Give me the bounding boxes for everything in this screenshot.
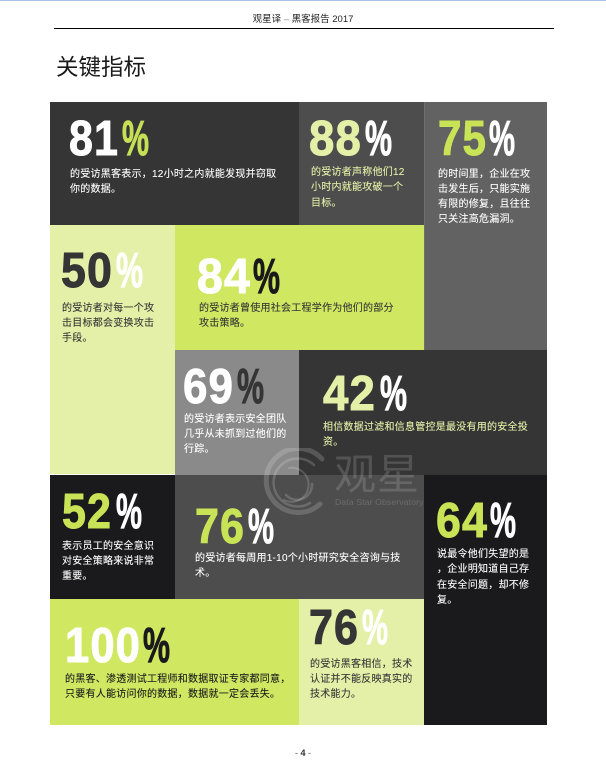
panel: 76% hours: 76 bbox=[195, 500, 245, 554]
panel: 76% hours bbox=[175, 475, 424, 599]
panel: 69%: % bbox=[237, 360, 264, 414]
panel: 52%: 表示员工的安全意识 bbox=[62, 540, 154, 552]
panel: 76% certification bbox=[299, 599, 424, 725]
panel: 69%: 几乎从未抓到过他们的 bbox=[184, 429, 286, 440]
panel: 75%: % bbox=[489, 112, 515, 166]
panel: 50%: 的受访者对每一个攻 bbox=[62, 302, 154, 314]
panel: 64% bbox=[424, 475, 547, 725]
running header: 观星译 – 黑客报告 2017 bbox=[253, 14, 353, 25]
panel: 100%: 的黑客、渗透测试工程师和数据取证专家都同意， bbox=[65, 674, 290, 684]
panel: 81% bbox=[50, 102, 299, 225]
panel: 64%: ，企业明知道自己存 bbox=[437, 564, 529, 575]
panel: 84%: 攻击策略。 bbox=[199, 318, 250, 329]
panel: 88%: 小时内就能攻破一个 bbox=[311, 182, 403, 193]
panel: 50%: 击目标都会变换攻击 bbox=[62, 318, 154, 329]
panel: 76% hours: 的受访者每周用1-10个小时研究安全咨询与技 bbox=[195, 553, 401, 564]
panel: 76% certification: 认证并不能反映真实的 bbox=[310, 674, 412, 685]
page number: - 4 - bbox=[295, 748, 311, 758]
panel: 42%: 资。 bbox=[323, 437, 344, 448]
panel: 81%: 的受访黑客表示，12小时之内就能发现并窃取 bbox=[70, 168, 276, 180]
panel: 81%: % bbox=[122, 112, 149, 166]
panel: 50%: 50 bbox=[61, 244, 113, 298]
panel: 75%: 75 bbox=[438, 112, 487, 166]
panel: 84%: 84 bbox=[197, 250, 251, 304]
panel: 88%: 88 bbox=[309, 112, 362, 166]
panel: 88%: 目标。 bbox=[311, 198, 342, 209]
panel: 81%: 81 bbox=[69, 112, 119, 166]
panel: 81%: 你的数据。 bbox=[70, 184, 121, 195]
panel: 69%: 的受访者表示安全团队 bbox=[184, 414, 286, 424]
panel: 50% bbox=[50, 225, 175, 474]
panel: 75%: 击发生后，只能实施 bbox=[438, 184, 530, 195]
panel: 64%: % bbox=[490, 494, 516, 548]
panel: 75%: 有限的修复，且往往 bbox=[438, 199, 530, 210]
panel: 84%: % bbox=[253, 250, 280, 304]
panel: 76% certification: 技术能力。 bbox=[310, 689, 361, 700]
panel: 84% bbox=[175, 225, 424, 350]
panel: 100%: % bbox=[143, 619, 170, 673]
panel: 52% bbox=[50, 475, 175, 599]
panel: 64%: 在安全问题，却不修 bbox=[437, 580, 529, 591]
panel: 42%: % bbox=[380, 367, 407, 421]
watermark tagline: Data Star Observatory bbox=[335, 497, 424, 507]
panel: 42% bbox=[299, 350, 547, 475]
panel: 100%: 100 bbox=[65, 619, 141, 673]
panel: 75% bbox=[424, 102, 547, 350]
panel: 76% certification: 76 bbox=[309, 601, 359, 655]
icon: watermark swirl bbox=[264, 448, 324, 515]
panel: 88%: % bbox=[365, 112, 392, 166]
watermark bbox=[264, 448, 424, 515]
panel: 76% certification: 的受访黑客相信，技术 bbox=[310, 658, 412, 670]
panel: 64%: 64 bbox=[436, 494, 488, 548]
panel: 50%: % bbox=[116, 244, 143, 298]
panel: 69%: 行踪。 bbox=[184, 444, 215, 455]
panel: 100%: 只要有人能访问你的数据，数据就一定会丢失。 bbox=[65, 689, 280, 700]
panel: 88% bbox=[299, 102, 424, 225]
panel: 76% certification: % bbox=[362, 601, 388, 655]
panel: 52%: 52 bbox=[62, 485, 112, 539]
title: 关键指标 bbox=[56, 55, 146, 80]
panel: 64%: 说最令他们失望的是 bbox=[437, 549, 529, 560]
top accent line bbox=[0, 0, 606, 1]
panel: 64%: 复。 bbox=[437, 595, 458, 606]
header rule bbox=[54, 28, 554, 29]
panel: 42%: 42 bbox=[323, 367, 376, 421]
panel: 84%: 的受访者曾使用社会工程学作为他们的部分 bbox=[199, 302, 394, 314]
panel: 75%: 只关注高危漏洞。 bbox=[438, 214, 520, 225]
panel: 42%: 相信数据过滤和信息管控是最没有用的安全投 bbox=[323, 422, 528, 433]
panel: 69% bbox=[175, 350, 299, 475]
watermark wordmark: 观星 bbox=[334, 451, 420, 498]
panel: 75%: 的时间里，企业在攻 bbox=[438, 168, 530, 180]
panel: 52%: 重要。 bbox=[62, 571, 93, 582]
panel: 52%: % bbox=[116, 485, 142, 539]
panel: 76% hours: % bbox=[248, 500, 274, 554]
panel: 76% hours: 术。 bbox=[195, 568, 216, 579]
panel: 52%: 对安全策略来说非常 bbox=[62, 556, 154, 567]
panel: 88%: 的受访者声称他们12 bbox=[311, 167, 405, 178]
panel: 69%: 69 bbox=[183, 360, 234, 414]
panel: 100% bbox=[50, 599, 299, 725]
panel: 50%: 手段。 bbox=[62, 333, 93, 344]
